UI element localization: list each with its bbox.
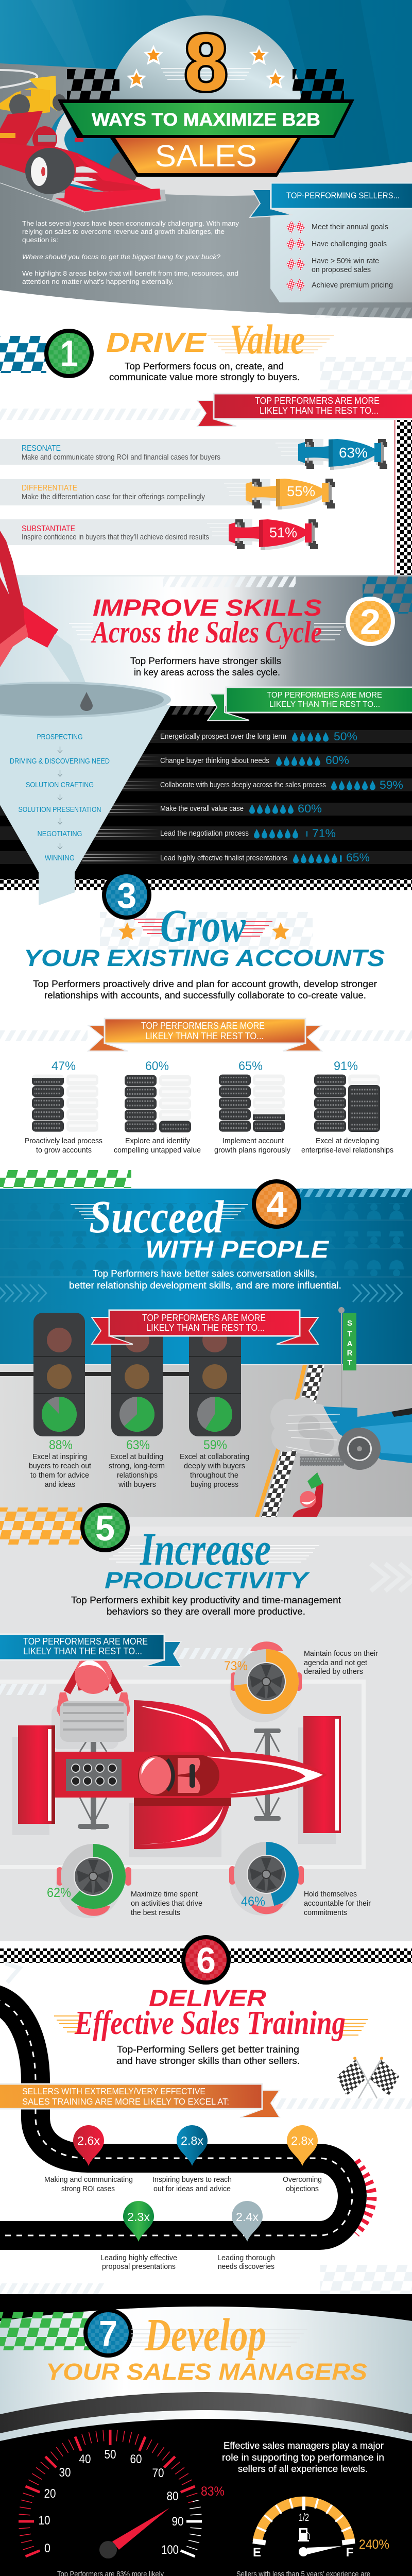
- panel: top-performing sellers: on proposed sales: [312, 266, 371, 274]
- funnel with sales stages: PROSPECTING: [37, 733, 82, 741]
- pit box outline: [0, 1648, 364, 1867]
- intro text: relying on sales to overcome revenue and growth challenges, the: [22, 228, 225, 235]
- intro text: behaviors so they are overall more productive.: [107, 1606, 305, 1617]
- start line: [255, 1365, 324, 1517]
- chart: speedometer 83 percent: 90: [172, 2515, 183, 2529]
- chart: speedometer 83 percent: 83%: [201, 2484, 225, 2499]
- chart: fuel gauge 240 percent: [253, 2497, 389, 2560]
- intro text: better relationship development skills, and are more influential.: [69, 1280, 341, 1291]
- panel: top-performing sellers: TOP-PERFORMING SELLERS...: [286, 191, 400, 200]
- tire gauge: 62 percent: Maximize time spent: [131, 1890, 198, 1899]
- traffic light: 59 percent: throughout the: [190, 1471, 238, 1480]
- skill rows: 71%: [312, 827, 336, 840]
- heading: improve skills: IMPROVE SKILLS: [93, 595, 322, 621]
- text block: sales managers: Effective sales managers play a major: [224, 2441, 384, 2451]
- pin: 2.6x: [44, 2125, 133, 2193]
- intro text: [71, 1595, 341, 1617]
- pin: 2.4x: 2.4x: [236, 2210, 259, 2224]
- funnel with sales stages: SOLUTION CRAFTING: [26, 781, 94, 789]
- tire gauge: 73 percent: derailed by others: [304, 1667, 363, 1676]
- skill rows: [0, 730, 412, 864]
- heading: increase productivity: Increase: [140, 1524, 271, 1575]
- chart: speedometer 83 percent: 100: [161, 2543, 179, 2557]
- heading: succeed with people: [71, 1192, 330, 1263]
- skill rows: 65%: [346, 851, 370, 864]
- number badge 5: 5: [95, 1508, 115, 1548]
- chart: speedometer 83 percent: 70: [152, 2466, 164, 2480]
- start sign: T: [347, 1359, 352, 1367]
- pin: 2.3x: 2.3x: [127, 2210, 150, 2224]
- tire chart: 91 percent: Excel at developing: [316, 1137, 379, 1145]
- intro text: relationships with accounts, and successfully collaborate to co-create value.: [44, 990, 366, 1001]
- traffic light: 63 percent: 63%: [126, 1438, 150, 1452]
- red ribbon: [92, 1310, 318, 1344]
- tire chart: 65 percent: Implement account: [222, 1137, 284, 1145]
- traffic light: 63 percent: strong, long-term: [109, 1462, 165, 1470]
- panel: section 2 improve skills: [0, 531, 412, 905]
- text block: sales managers: sellers of all experience levels.: [238, 2464, 368, 2474]
- number badge 5: [80, 1503, 130, 1552]
- tire chart: 60 percent: [114, 1059, 201, 1155]
- chart: speedometer 83 percent: 50: [104, 2448, 116, 2462]
- tire chart: 65 percent: [214, 1059, 290, 1155]
- tire gauge: 62 percent: on activities that drive: [131, 1899, 202, 1908]
- orange ribbon: [0, 2084, 280, 2117]
- chart: fuel gauge 240 percent: F: [346, 2546, 353, 2560]
- number badge 6: [181, 1935, 231, 1985]
- traffic light: 63 percent: Excel at building: [110, 1452, 163, 1461]
- traffic light: 63 percent: [109, 1313, 165, 1489]
- tire gauge: 62 percent: 62%: [47, 1886, 71, 1900]
- finish line: [394, 420, 412, 575]
- panel: section 6 deliver training: [0, 1935, 412, 2294]
- traffic light: 63 percent: with buyers: [118, 1480, 156, 1489]
- traffic light: 59 percent: [180, 1313, 249, 1489]
- traffic light: 88 percent: and ideas: [45, 1480, 75, 1489]
- tire gauge: 46 percent: commitments: [304, 1908, 347, 1917]
- intro text: Top Performers proactively drive and plan for account growth, develop stronger: [33, 979, 377, 989]
- traffic light: 88 percent: to them for advice: [30, 1471, 89, 1480]
- bar: resonate: Make and communicate strong ROI and financial cases for buyers: [22, 453, 220, 462]
- orange ribbon: LIKELY THAN THE REST TO...: [145, 1031, 264, 1041]
- skill rows: 59%: [380, 778, 403, 791]
- green ribbon: [208, 687, 412, 721]
- traffic light pole: [0, 1372, 191, 1376]
- orange ribbon: [88, 1019, 322, 1051]
- pin: 2.3x: [100, 2201, 177, 2271]
- number badge 3: [102, 870, 151, 920]
- heading: grow your existing accounts: YOUR EXISTING ACCOUNTS: [24, 945, 385, 971]
- intro text: [130, 656, 281, 677]
- number badge 4: 4: [266, 1184, 287, 1225]
- number badge 2: 2: [360, 602, 381, 642]
- tire chart: 47 percent: [25, 1059, 102, 1155]
- red ribbon: [197, 394, 412, 427]
- pin: 2.8x: [152, 2125, 232, 2193]
- bar: substantiate: Inspire confidence in buyers that they’ll achieve desired results: [22, 533, 209, 541]
- traffic light: 88 percent: Excel at inspiring: [32, 1452, 87, 1461]
- funnel with sales stages: SOLUTION PRESENTATION: [19, 805, 101, 814]
- traffic light: 63 percent: relationships: [117, 1471, 158, 1480]
- bar: resonate: RESONATE: [22, 444, 61, 453]
- intro text: and have stronger skills than other sellers.: [116, 2056, 300, 2066]
- traffic light: 59 percent: Excel at collaborating: [180, 1452, 249, 1461]
- start sign: R: [347, 1349, 353, 1358]
- chart: speedometer 83 percent: 20: [44, 2487, 56, 2501]
- pin: 2.4x: Leading thorough: [217, 2253, 275, 2262]
- icon: red race car: [0, 111, 166, 212]
- funnel with sales stages: WINNING: [45, 854, 75, 862]
- number badge 7: 7: [99, 2313, 117, 2353]
- bar: substantiate: [0, 519, 318, 550]
- number badge 6: 6: [196, 1940, 216, 1980]
- text block: sales managers: role in supporting top performance in: [222, 2452, 384, 2463]
- chart: speedometer 83 percent: [19, 2430, 225, 2558]
- pin: 2.3x: Leading highly effective: [100, 2253, 177, 2262]
- bar: differentiate: Make the differentiation case for their offerings compellingly: [22, 493, 205, 501]
- start sign: S: [347, 1319, 352, 1328]
- pin: 2.8x overcoming objections: objections: [286, 2184, 319, 2193]
- checkered stripe: [0, 336, 46, 373]
- bar: differentiate: [0, 479, 335, 510]
- intro text: The last several years have been economically challenging. With many: [22, 219, 239, 227]
- tire gauge: 46 percent: 46%: [241, 1894, 265, 1909]
- skill rows: Energetically prospect over the long term: [160, 733, 286, 741]
- skill rows: Collaborate with buyers deeply across the sales process: [160, 781, 326, 789]
- number badge 3: 3: [117, 875, 136, 916]
- panel: section 7 develop managers: [0, 2294, 412, 2576]
- heading: improve skills: Across the Sales Cycle: [91, 615, 322, 649]
- heading: increase productivity: [105, 1524, 319, 1594]
- pin: 2.6x: 2.6x: [77, 2134, 100, 2147]
- tire chart: 60 percent: compelling untapped value: [114, 1146, 201, 1155]
- red ribbon: TOP PERFORMERS ARE MORE: [142, 1313, 266, 1323]
- traffic light: 59 percent: buying process: [191, 1480, 238, 1489]
- traffic light: 88 percent: buyers to reach out: [29, 1462, 92, 1470]
- bar: substantiate: 51%: [269, 524, 297, 540]
- skill rows: Lead the negotiation process: [160, 829, 249, 838]
- heading: deliver effective sales training: Effective Sales Training: [74, 2004, 346, 2042]
- intro text: Top Performers focus on, create, and: [125, 361, 284, 371]
- chart: speedometer 83 percent: 0: [44, 2541, 50, 2555]
- heading: develop your sales managers: YOUR SALES MANAGERS: [46, 2359, 367, 2385]
- panel: section 1 drive value: [0, 316, 412, 575]
- panel: section 4 succeed with people: [0, 1170, 412, 1517]
- skill rows: Lead highly effective finalist presentations: [160, 854, 287, 862]
- tire gauge: 73 percent: [224, 1641, 378, 1707]
- orange ribbon: SALES TRAINING ARE MORE LIKELY TO EXCEL AT:: [22, 2096, 229, 2107]
- skill rows: Make the overall value case: [160, 805, 244, 813]
- intro text: Top Performers have stronger skills: [130, 656, 281, 666]
- heading: deliver effective sales training: DELIVER: [149, 1985, 267, 2011]
- blue ribbon: LIKELY THAN THE REST TO...: [23, 1646, 142, 1656]
- pin: 2.8x overcoming objections: 2.8x: [291, 2134, 314, 2147]
- intro text: Top Performers exhibit key productivity and time-management: [71, 1595, 341, 1605]
- icon: crossed checkered flags: [337, 2057, 399, 2098]
- start sign: T: [347, 1330, 352, 1338]
- panel: top-performing sellers: Have > 50% win rate: [312, 257, 379, 265]
- heading: deliver effective sales training: [54, 1985, 368, 2042]
- intro text: question is:: [22, 236, 58, 244]
- top-down race car: [18, 1700, 341, 1849]
- intro text: attention no matter what’s happening externally.: [22, 278, 174, 285]
- heading: increase productivity: PRODUCTIVITY: [105, 1567, 311, 1594]
- tire chart: 47 percent: to grow accounts: [36, 1146, 92, 1155]
- chart: fuel gauge 240 percent: E: [253, 2546, 261, 2560]
- pin: 2.6x: strong ROI cases: [61, 2184, 115, 2193]
- icon: yellow race car: [0, 76, 66, 117]
- pin: 2.8x overcoming objections: [283, 2125, 322, 2193]
- heading: develop your sales managers: [46, 2310, 367, 2385]
- green title banner: WAYS TO MAXIMIZE B2B: [92, 110, 320, 130]
- panel: top-performing sellers: [250, 183, 412, 302]
- orange ribbon: SELLERS WITH EXTREMELY/VERY EFFECTIVE: [22, 2086, 205, 2096]
- heading: grow your existing accounts: Grow: [160, 901, 246, 952]
- traffic light: 88 percent: 88%: [49, 1438, 73, 1452]
- checkered flags beside dome: [67, 69, 344, 99]
- heading: grow your existing accounts: [24, 901, 385, 971]
- pit crew member carrying tire: [57, 1656, 130, 1742]
- tire chart: 65 percent: 65%: [238, 1059, 263, 1073]
- icon: red oil can: [0, 531, 58, 667]
- pin: 2.8x overcoming objections: Overcoming: [283, 2175, 322, 2184]
- icon: blue car with tire smoke: [270, 1397, 412, 1470]
- panel: top-performing sellers: Achieve premium pricing: [312, 281, 393, 290]
- blue ribbon: [0, 1634, 181, 1667]
- chart: speedometer 83 percent: 30: [59, 2466, 71, 2480]
- panel: section 3 grow accounts: [0, 870, 412, 1155]
- tire chart: 60 percent: Explore and identify: [125, 1137, 190, 1145]
- green ribbon: TOP PERFORMERS ARE MORE: [267, 691, 382, 700]
- chart: fuel gauge 240 percent: 1/2: [299, 2512, 309, 2523]
- pin: 2.8x: Inspiring buyers to reach: [152, 2175, 232, 2184]
- bar: resonate: 63%: [339, 445, 368, 461]
- intro text: in key areas across the sales cycle.: [134, 667, 280, 677]
- big number 8: 8: [184, 18, 228, 108]
- blue ribbon: TOP PERFORMERS ARE MORE: [23, 1636, 148, 1647]
- bar: resonate: [0, 439, 387, 470]
- panel: top-performing sellers: Meet their annual goals: [312, 223, 388, 231]
- skill rows: Change buyer thinking about needs: [160, 757, 269, 765]
- intro text: We highlight 8 areas below that will benefit from time, resources, and: [22, 269, 238, 277]
- tire gauge: 46 percent: accountable for their: [304, 1899, 371, 1908]
- chart: speedometer 83 percent: 40: [79, 2452, 91, 2466]
- tire chart: 47 percent: Proactively lead process: [25, 1137, 102, 1145]
- intro text: [22, 219, 239, 285]
- pin: 2.4x: [217, 2201, 275, 2271]
- heading: drive value: Value: [230, 316, 305, 363]
- bar: differentiate: DIFFERENTIATE: [22, 484, 77, 493]
- text block: sales managers: [222, 2441, 384, 2474]
- tire chart: 60 percent: 60%: [145, 1059, 169, 1073]
- bar: substantiate: SUBSTANTIATE: [22, 524, 75, 533]
- heading: drive value: [106, 316, 334, 363]
- green ribbon: LIKELY THAN THE REST TO...: [269, 700, 380, 709]
- pin: 2.6x: Making and communicating: [44, 2175, 133, 2184]
- tire gauge: 46 percent: [229, 1849, 371, 1917]
- red ribbon: LIKELY THAN THE REST TO...: [260, 405, 379, 416]
- number badge 1: 1: [60, 333, 78, 375]
- panel: section 5 increase productivity: [0, 1503, 412, 1941]
- red ribbon: TOP PERFORMERS ARE MORE: [255, 396, 380, 406]
- chart: speedometer 83 percent: 60: [130, 2452, 142, 2466]
- car shadows: [12, 1657, 336, 1918]
- traffic light: 59 percent: deeply with buyers: [184, 1462, 245, 1470]
- bar: differentiate: 55%: [287, 483, 315, 499]
- skill rows: 50%: [334, 730, 357, 743]
- intro text: [69, 1268, 341, 1291]
- heading: succeed with people: WITH PEOPLE: [145, 1235, 330, 1263]
- chart: speedometer 83 percent: 10: [38, 2514, 50, 2528]
- tire chart: 91 percent: [301, 1059, 393, 1155]
- green title banner: SALES: [155, 139, 257, 173]
- number badge 7: [83, 2308, 133, 2358]
- tire chart: 91 percent: enterprise-level relationships: [301, 1146, 393, 1155]
- tire gauge: 46 percent: Hold themselves: [304, 1890, 357, 1899]
- tire chart: 91 percent: 91%: [334, 1059, 358, 1073]
- pin: 2.8x: out for ideas and advice: [153, 2184, 231, 2193]
- skill rows: 60%: [298, 802, 322, 815]
- intro text: Top-Performing Sellers get better training: [117, 2044, 299, 2055]
- number badge 1: [44, 329, 94, 378]
- intro text: communicate value more strongly to buyers.: [109, 372, 300, 382]
- panel: top-performing sellers: Have challenging goals: [312, 240, 387, 248]
- panel: hero header: [0, 0, 412, 318]
- tire gauge: 62 percent: the best results: [131, 1908, 180, 1917]
- heading: improve skills: [69, 595, 346, 649]
- start sign: [338, 1307, 356, 1408]
- funnel with sales stages: NEGOTIATING: [37, 829, 82, 838]
- tire chart: 47 percent: 47%: [52, 1059, 76, 1073]
- traffic light: 88 percent: [29, 1313, 92, 1489]
- heading: drive value: DRIVE: [106, 327, 207, 358]
- pin: 2.8x: 2.8x: [181, 2134, 203, 2147]
- pin: 2.4x: needs discoveries: [218, 2262, 274, 2271]
- tire gauge: 62 percent: [47, 1851, 202, 1917]
- funnel with sales stages: [0, 634, 171, 905]
- chart: speedometer 83 percent: 80: [167, 2489, 178, 2503]
- race track road: [0, 1999, 372, 2235]
- title badge dome: [110, 15, 301, 99]
- number badge 4: [252, 1179, 301, 1229]
- chart: fuel gauge 240 percent: 240%: [359, 2537, 389, 2552]
- tire gauge: 73 percent: 73%: [224, 1659, 248, 1673]
- orange ribbon: TOP PERFORMERS ARE MORE: [141, 1021, 265, 1031]
- tire gauge: 73 percent: agenda and not get: [304, 1658, 368, 1667]
- intro text: [109, 361, 300, 382]
- tire gauge: 73 percent: Maintain focus on their: [304, 1649, 378, 1658]
- icon: flag marshal: [293, 1471, 323, 1517]
- intro text: Where should you focus to get the biggest bang for your buck?: [22, 253, 221, 261]
- red ribbon: LIKELY THAN THE REST TO...: [146, 1323, 265, 1333]
- number badge 2: [346, 597, 395, 646]
- pin: 2.3x: proposal presentations: [102, 2262, 176, 2271]
- intro text: [116, 2044, 300, 2066]
- green title banner: [58, 99, 354, 177]
- skill rows: 60%: [325, 754, 349, 767]
- tire chart: 65 percent: growth plans rigorously: [214, 1146, 290, 1155]
- traffic light: 59 percent: 59%: [203, 1438, 227, 1452]
- start sign: A: [347, 1340, 353, 1348]
- intro text: [33, 979, 377, 1001]
- intro text: Top Performers have better sales conversation skills,: [93, 1268, 317, 1279]
- heading: develop your sales managers: Develop: [144, 2310, 266, 2361]
- heading: succeed with people: Succeed: [89, 1192, 225, 1243]
- funnel with sales stages: DRIVING & DISCOVERING NEED: [10, 757, 110, 766]
